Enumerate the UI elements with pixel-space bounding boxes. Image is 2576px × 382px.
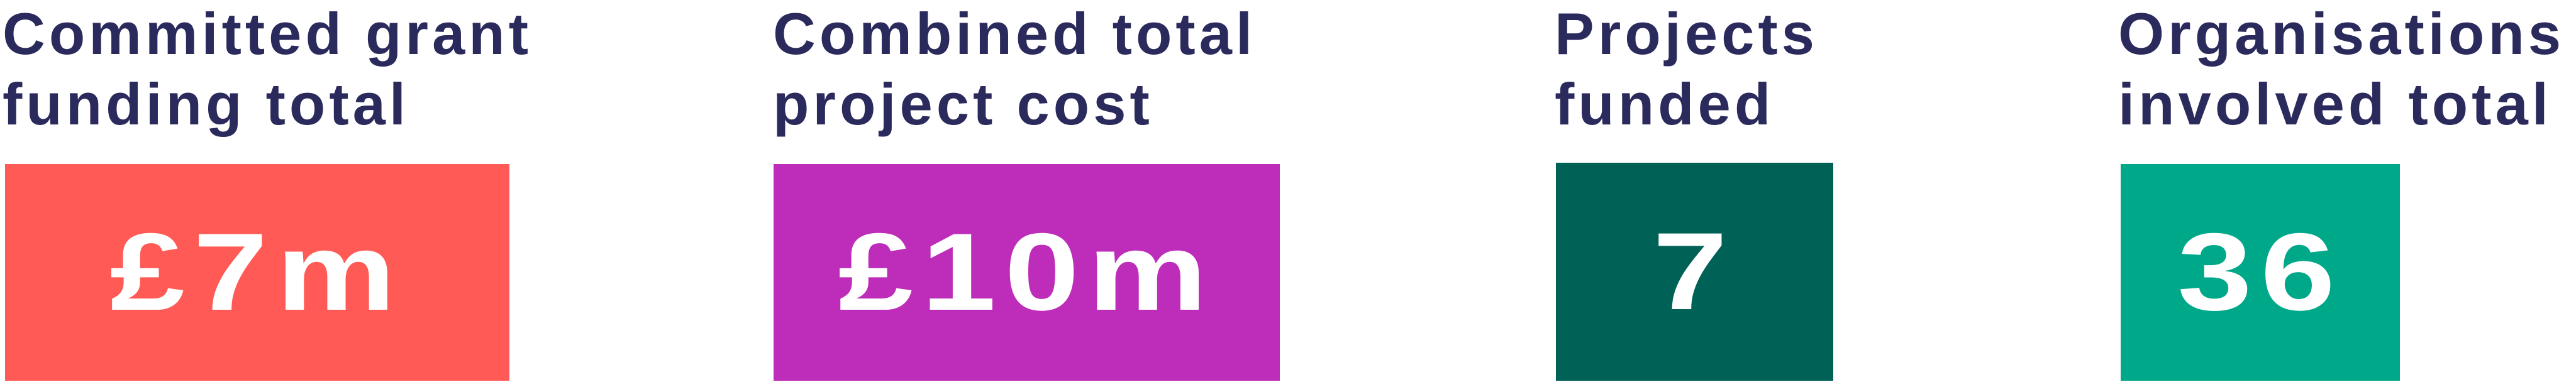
value box: £7m <box>5 164 509 381</box>
heading: projects funded: funded <box>1555 71 1774 137</box>
heading: organisations involved total <box>2118 1 2565 137</box>
value box: 36 <box>2121 164 2400 381</box>
value box: £7m: £7m <box>110 211 404 334</box>
panel: committed grant funding <box>3 1 532 381</box>
panel: projects funded <box>1555 1 1833 381</box>
heading: committed grant funding total <box>3 1 532 137</box>
value box: 36: 36 <box>2177 211 2343 334</box>
panel: organisations involved total <box>2118 1 2565 381</box>
heading: committed grant funding total: Committed grant <box>3 1 532 67</box>
value box: £10m <box>774 164 1280 381</box>
value box: 7: 7 <box>1653 210 1736 333</box>
panel: combined total project cost <box>773 1 1280 381</box>
heading: organisations involved total: Organisations <box>2118 1 2565 67</box>
heading: organisations involved total: involved total <box>2118 71 2552 137</box>
heading: committed grant funding total: funding total <box>3 71 409 137</box>
heading: projects funded: Projects <box>1555 1 1818 67</box>
value box: 7 <box>1556 163 1833 381</box>
heading: combined total project cost <box>773 1 1256 137</box>
value box: £10m: £10m <box>838 211 1215 334</box>
heading: combined total project cost: project cost <box>773 71 1153 137</box>
heading: projects funded <box>1555 1 1818 137</box>
heading: combined total project cost: Combined total <box>773 1 1256 67</box>
